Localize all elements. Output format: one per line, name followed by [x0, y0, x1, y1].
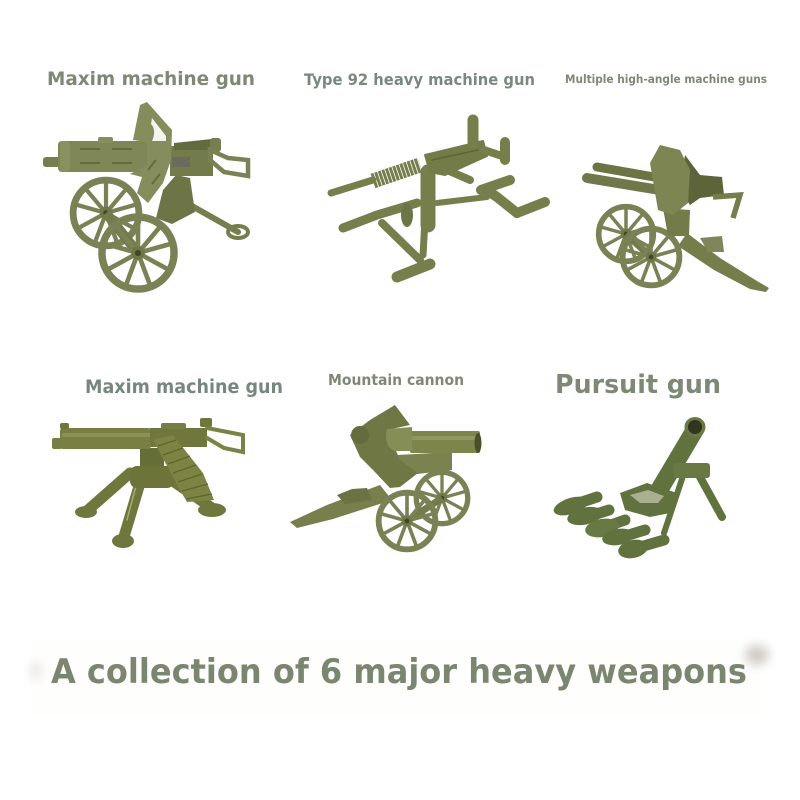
icon: twin-barrel wheeled gun: [587, 145, 769, 292]
heading: Pursuit gun: Pursuit gun: [555, 370, 721, 400]
heading: Multiple high-angle machine guns: Multiple high-angle machine guns: [565, 72, 767, 86]
icon: tripod Maxim gun with ammo belt: [52, 418, 243, 548]
panel: Mountain cannon: [290, 371, 482, 549]
heading: Maxim machine gun: Maxim machine gun: [85, 377, 283, 398]
icon: wheeled Maxim gun: [43, 102, 248, 289]
heading: Type 92 heavy machine gun: Type 92 heavy machine gun: [304, 70, 535, 89]
panel: Maxim machine gun on tripod: [52, 377, 283, 548]
title: A collection of 6 major heavy weapons: A collection of 6 major heavy weapons: [51, 652, 747, 692]
heading: Mountain cannon: Mountain cannon: [328, 371, 464, 389]
panel: Type 92 heavy machine gun: [304, 70, 545, 277]
panel: Pursuit gun: [551, 370, 722, 561]
panel: Multiple high-angle machine guns: [565, 72, 769, 292]
icon: Type 92 gun on tripod: [331, 120, 545, 277]
icon: wheeled mountain cannon: [290, 405, 482, 549]
icon: mortar with five shells: [551, 417, 722, 561]
heading: Maxim machine gun: Maxim machine gun: [47, 68, 255, 90]
panel: Maxim machine gun on wheeled carriage: [43, 68, 255, 289]
